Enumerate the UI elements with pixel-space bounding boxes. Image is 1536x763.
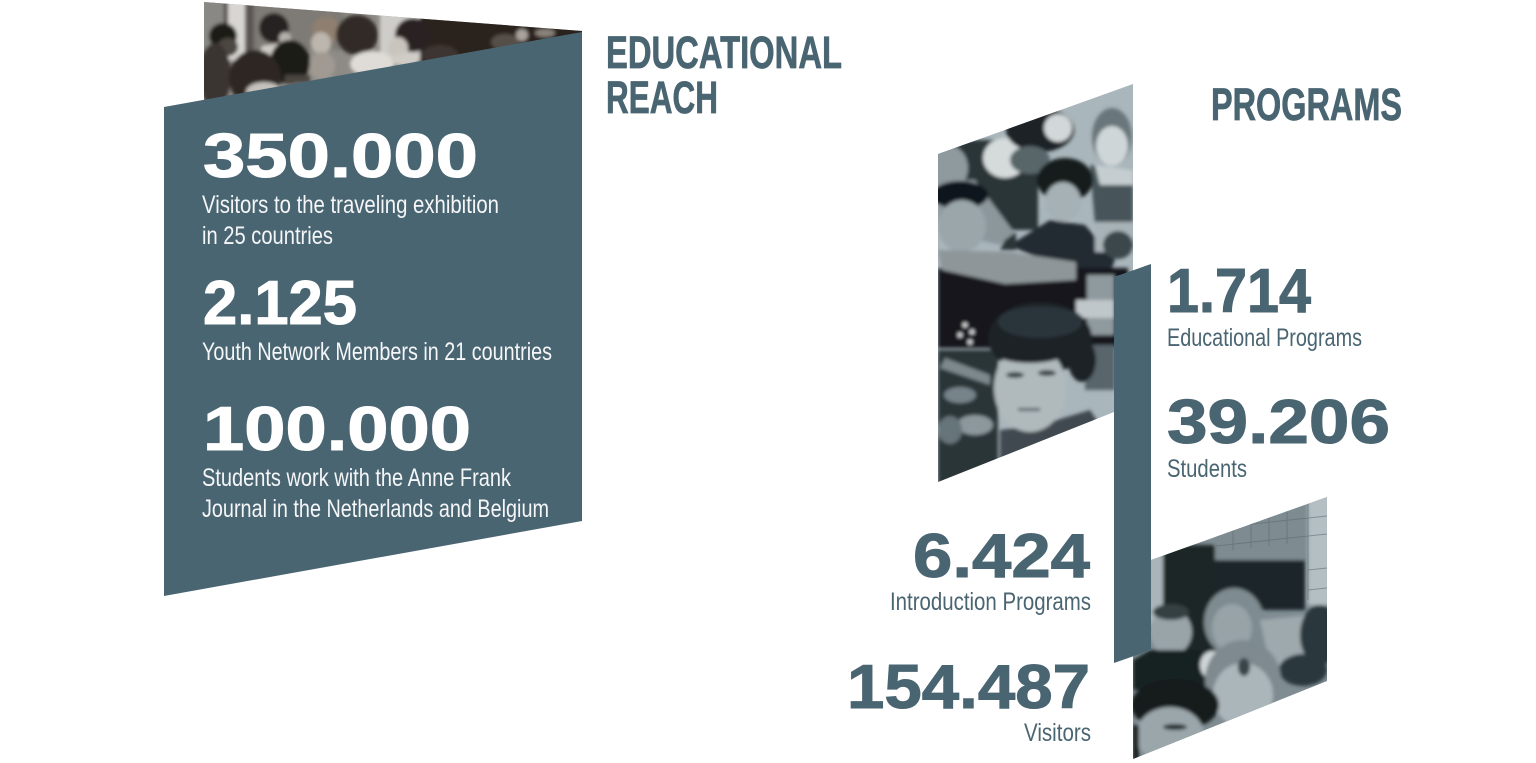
stat: 350.000 visitors: Visitors to the traveling exhibition bbox=[202, 191, 499, 219]
stat: 1.714 educational programs: 1.714 bbox=[1167, 257, 1311, 326]
stat: 39.206 students: 39.206 bbox=[1167, 388, 1390, 457]
stat: 350.000 visitors: 350.000 bbox=[203, 122, 478, 191]
stat: 39.206 students: Students bbox=[1167, 455, 1247, 483]
heading: educational reach bbox=[606, 27, 842, 123]
stat: 1.714 educational programs bbox=[1167, 257, 1362, 352]
stat: 6.424 introduction programs bbox=[890, 522, 1091, 616]
stat: 100.000 students: Journal in the Netherlands and Belgium bbox=[202, 495, 549, 523]
photo: classroom children bbox=[930, 80, 1140, 490]
stat: 1.714 educational programs: Educational Programs bbox=[1167, 324, 1362, 352]
stat: 350.000 visitors bbox=[202, 122, 499, 250]
stat: 2.125 youth network members bbox=[202, 269, 552, 366]
stat: 154.487 visitors: 154.487 bbox=[847, 653, 1090, 722]
panel: educational reach bbox=[164, 32, 582, 596]
stat: 154.487 visitors: Visitors bbox=[1024, 719, 1091, 747]
stat: 6.424 introduction programs: 6.424 bbox=[913, 522, 1091, 591]
stat: 100.000 students: 100.000 bbox=[203, 395, 471, 464]
stat: 100.000 students bbox=[202, 395, 549, 523]
stat: 6.424 introduction programs: Introduction Programs bbox=[890, 588, 1091, 616]
stat: 2.125 youth network members: Youth Network Members in 21 countries bbox=[202, 338, 552, 366]
stat: 2.125 youth network members: 2.125 bbox=[203, 269, 357, 338]
stat: 100.000 students: Students work with the Anne Frank bbox=[202, 464, 511, 492]
photo: students in a group discussion bbox=[204, 2, 582, 100]
heading: educational reach: EDUCATIONAL bbox=[606, 27, 842, 78]
stat: 350.000 visitors: in 25 countries bbox=[202, 222, 333, 250]
photo: children in a kitchen bbox=[1133, 497, 1327, 759]
heading: programs: PROGRAMS bbox=[1211, 79, 1402, 130]
stat: 154.487 visitors bbox=[847, 653, 1091, 747]
stat: 39.206 students bbox=[1167, 388, 1390, 483]
heading: educational reach: REACH bbox=[606, 72, 718, 123]
bar: programs accent band bbox=[1114, 264, 1151, 663]
